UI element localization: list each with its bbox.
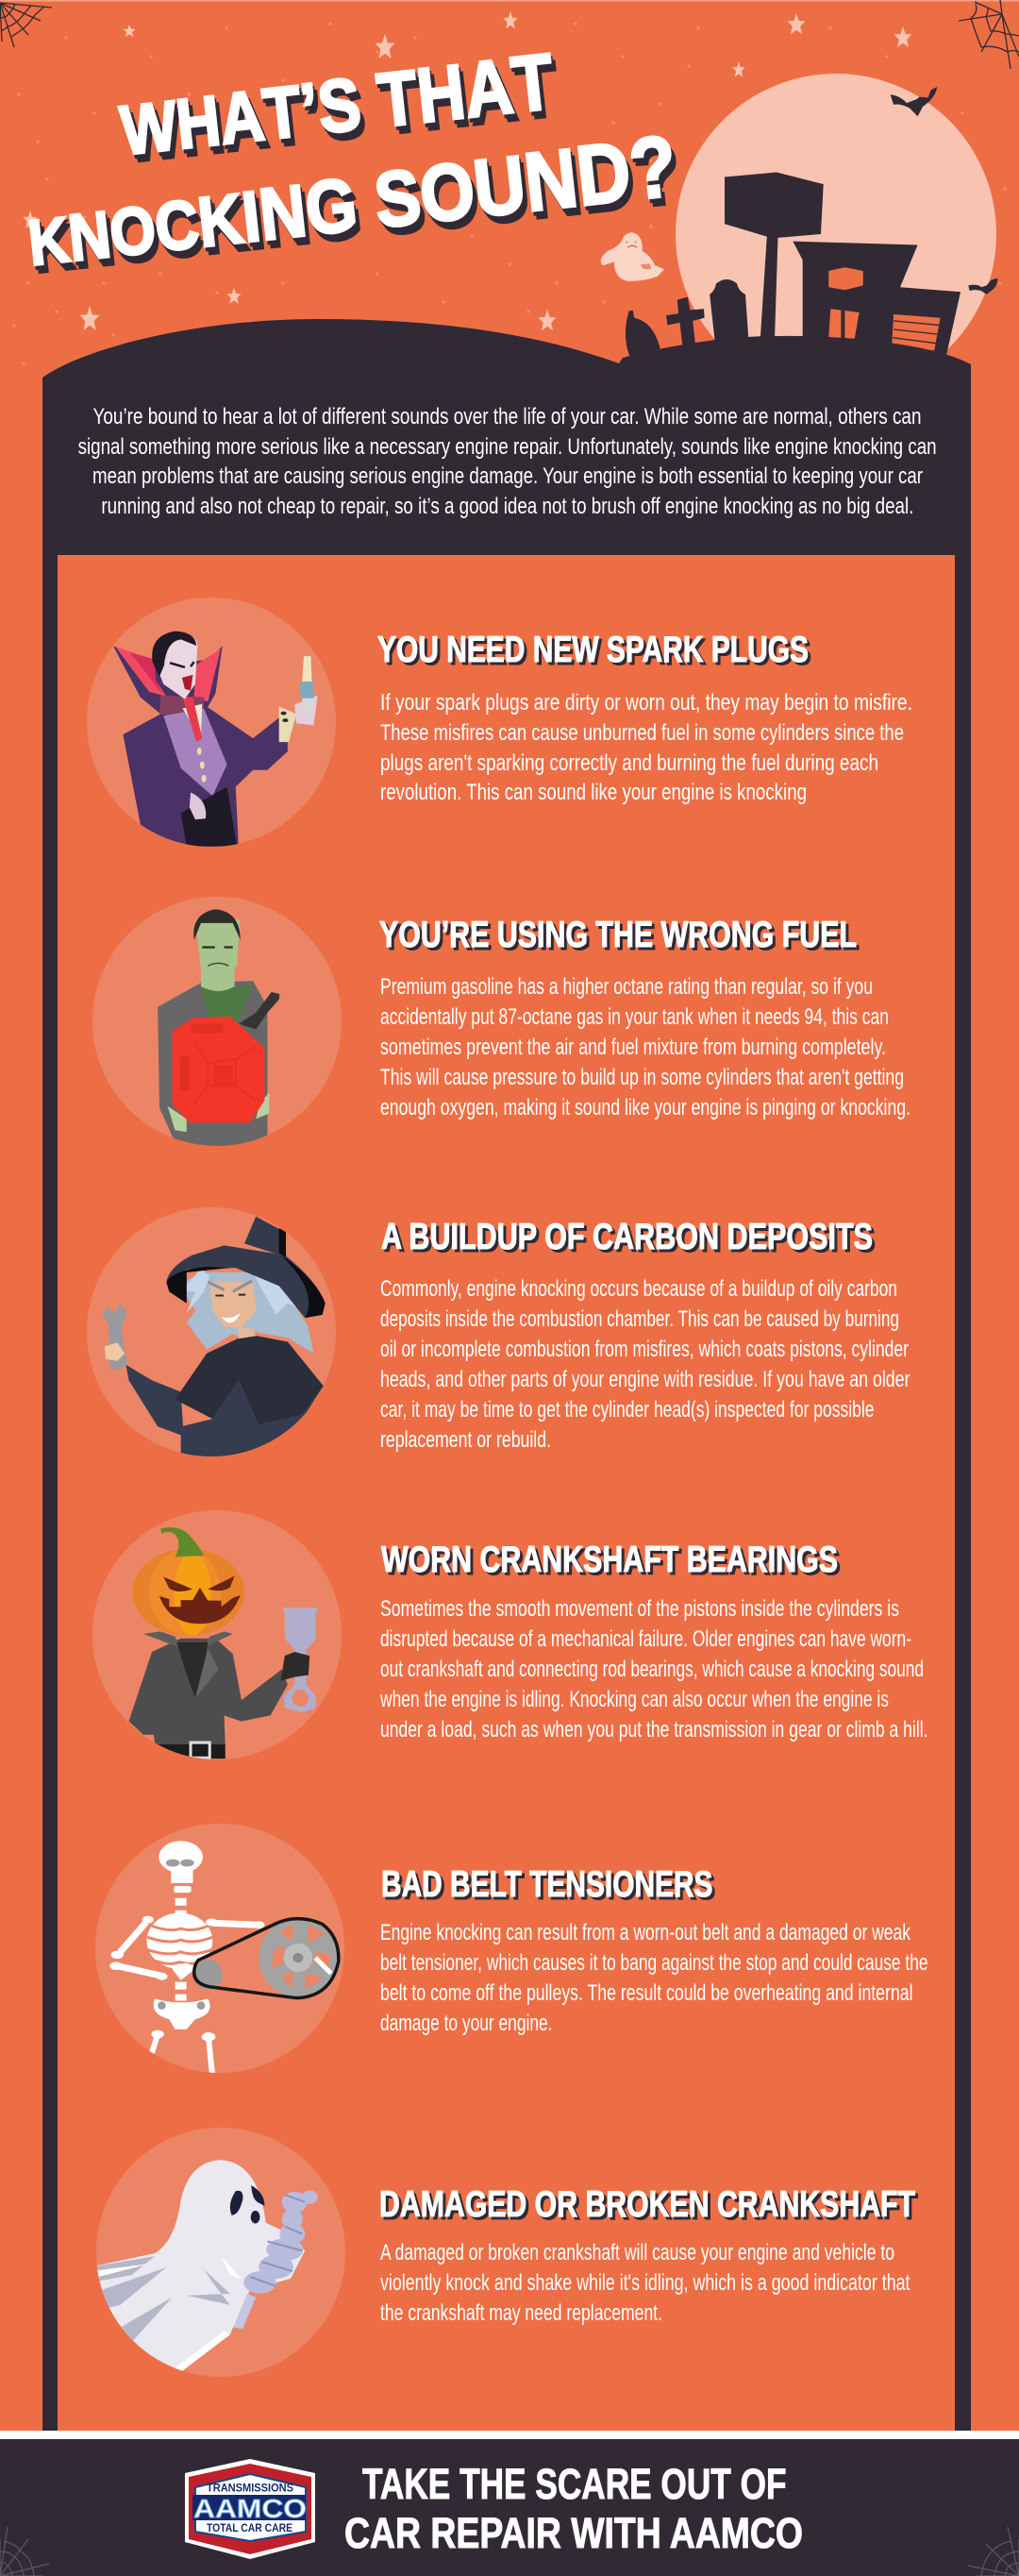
heading: BAD BELT TENSIONERS: [381, 1864, 713, 1905]
cobweb: footer left: [0, 2527, 49, 2576]
title: WHAT’S THAT: [118, 40, 560, 176]
heading: WORN CRANKSHAFT BEARINGS: [384, 1542, 841, 1583]
body text: [380, 2240, 910, 2326]
body text: replacement or rebuild.: [380, 1427, 551, 1453]
footer band: [0, 2431, 1019, 2576]
logo: AAMCO: TRANSMISSIONS: [207, 2483, 293, 2494]
call to action: [344, 2460, 803, 2557]
icon: bat lower: [968, 278, 997, 295]
icon: haunted house: [793, 242, 961, 356]
body text: [380, 1920, 928, 2036]
call to action: CAR REPAIR WITH AAMCO: [344, 2509, 803, 2557]
call to action: TAKE THE SCARE OUT OF: [362, 2460, 787, 2508]
illustration: pumpkin-head with piston: [92, 1510, 342, 1759]
stars: [23, 11, 911, 330]
illustration: witch with wrench: [87, 1207, 336, 1457]
section: carbon deposits: [87, 1207, 910, 1457]
dark hill and frame panel: [42, 319, 971, 2431]
panel: main orange content: [58, 555, 955, 2431]
heading: A BUILDUP OF CARBON DEPOSITS: [381, 1217, 873, 1257]
heading: YOU NEED NEW SPARK PLUGS: [380, 632, 811, 673]
heading: YOU’RE USING THE WRONG FUEL: [379, 915, 857, 955]
logo: AAMCO: [185, 2459, 315, 2559]
cobweb: top left: [0, 3, 52, 47]
body text: [380, 974, 910, 1120]
body text: the crankshaft may need replacement.: [380, 2300, 662, 2326]
body text: plugs aren't sparking correctly and burning the fuel during each: [380, 750, 878, 776]
icon: small tombstone: [626, 311, 660, 359]
section: crankshaft bearings: [92, 1510, 928, 1759]
section: broken crankshaft: [92, 2128, 918, 2377]
icon: bat upper: [891, 87, 937, 116]
section: wrong fuel: [92, 897, 910, 1149]
icon: road sign silhouette: [725, 173, 824, 338]
illustration: vampire with spark plug: [87, 598, 336, 847]
heading: YOU NEED NEW SPARK PLUGS: [377, 630, 809, 670]
title: WHAT’S THAT: [116, 36, 558, 172]
moon: [676, 74, 996, 395]
icon: tall tombstone: [710, 279, 748, 342]
title: KNOCKING SOUND?: [25, 122, 683, 288]
title: KNOCKING SOUND?: [27, 126, 686, 292]
logo: AAMCO: AAMCO: [193, 2494, 307, 2523]
heading: WORN CRANKSHAFT BEARINGS: [381, 1540, 838, 1580]
icon: cross: [666, 297, 705, 345]
moon with haunted silhouette: [601, 74, 997, 395]
body text: damage to your engine.: [380, 2011, 553, 2036]
heading: A BUILDUP OF CARBON DEPOSITS: [384, 1220, 876, 1260]
illustration: Frankenstein with fuel can: [92, 897, 342, 1149]
body text: revolution. This can sound like your engine is knocking: [380, 780, 807, 805]
section: belt tensioners: [95, 1824, 928, 2078]
cobweb: footer right: [968, 2527, 1019, 2576]
body text: [380, 690, 912, 805]
section: spark plugs: [87, 598, 912, 847]
title: [23, 36, 686, 292]
icon: small ghost: [601, 232, 664, 281]
heading: YOU’RE USING THE WRONG FUEL: [382, 918, 860, 958]
illustration: skeleton with belt and pulleys: [95, 1824, 344, 2078]
cobweb: top right: [959, 0, 1019, 69]
logo: AAMCO: TOTAL CAR CARE: [207, 2523, 292, 2534]
body text: [379, 1596, 928, 1743]
intro paragraph: [78, 404, 937, 519]
title: KNOCKING SOUND?: [23, 118, 681, 284]
title: WHAT’S THAT: [121, 43, 562, 179]
illustration: ghost with crankshaft: [92, 2128, 345, 2377]
body text: [380, 1276, 910, 1453]
heading: BAD BELT TENSIONERS: [384, 1867, 715, 1908]
